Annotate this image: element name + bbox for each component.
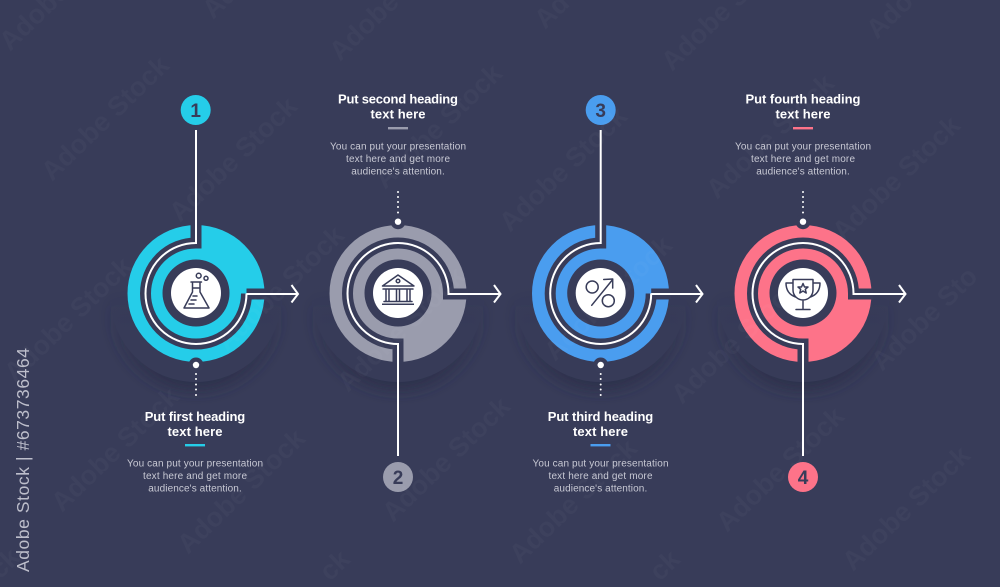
body text 4: text here and get more — [751, 154, 855, 165]
body text 4: You can put your presentation — [735, 142, 871, 153]
body text 2 — [330, 142, 466, 178]
stock watermarks: Adobe Stock — [665, 272, 806, 409]
colored ring 4 — [734, 225, 872, 362]
stock watermarks: ck — [643, 543, 686, 586]
heading 4 — [746, 92, 861, 122]
icon: bank — [364, 260, 432, 326]
dotted connector 3 — [593, 358, 608, 396]
icon: flask — [162, 260, 230, 326]
heading 2: Put second heading — [338, 92, 458, 106]
heading rule 1 — [185, 444, 205, 446]
stock watermarks: Adobe Stock — [210, 219, 351, 356]
stock watermarks: Adobe Stock — [35, 49, 176, 186]
dotted connector 2 — [390, 191, 406, 229]
body text 2: You can put your presentation — [330, 142, 466, 153]
colored ring 3 — [532, 225, 669, 362]
stock watermarks: Adobe Stock — [493, 100, 634, 237]
body text 4: audience's attention. — [756, 166, 850, 178]
step 3 — [514, 95, 702, 494]
heading 3 — [548, 409, 653, 439]
dotted connector 1 — [188, 358, 204, 396]
body text 4 — [735, 142, 871, 178]
stock watermarks: Adobe Stock — [538, 229, 679, 366]
heading 1: text here — [168, 424, 222, 439]
stock watermarks: Adobe Stock — [368, 57, 509, 194]
icon: percent growth — [567, 260, 634, 326]
disc shadow 4 — [717, 210, 889, 390]
number badge 3: 3 — [595, 101, 606, 122]
heading 2 — [338, 92, 458, 122]
stock watermarks: Adobe Stock — [826, 109, 967, 246]
heading rule 4 — [793, 127, 813, 129]
stock watermarks: Adobe Stock — [376, 390, 517, 527]
icon: trophy — [770, 260, 836, 326]
disc shadow 3 — [514, 210, 686, 390]
heading 3: Put third heading — [548, 409, 653, 424]
heading 4: Put fourth heading — [746, 92, 861, 106]
number badge 3 — [586, 95, 616, 125]
number badge 1: 1 — [190, 101, 201, 122]
stock watermarks: Adobe Stock — [45, 380, 186, 517]
stock watermarks: Adobe Stock — [331, 260, 472, 397]
heading rule 3 — [590, 444, 610, 446]
heading 3: text here — [573, 424, 628, 439]
colored ring 1 — [128, 225, 264, 362]
channel and connector line 2 — [348, 243, 500, 456]
body text 3: audience's attention. — [554, 484, 647, 494]
heading 4: text here — [776, 106, 830, 122]
stock watermarks: Adobe Stock — [700, 67, 841, 204]
body text 3: You can put your presentation — [532, 458, 668, 470]
number badge 4 — [788, 462, 818, 492]
channel and connector line 4 — [752, 243, 906, 456]
heading 2: text here — [370, 106, 426, 122]
body text 1: You can put your presentation — [127, 458, 263, 470]
heading rule 2 — [388, 127, 408, 129]
step 2 — [312, 92, 500, 492]
number badge 2: 2 — [393, 468, 403, 489]
disc shadow 2 — [312, 210, 484, 390]
heading 1: Put first heading — [145, 409, 245, 424]
disc shadow 1 — [110, 210, 282, 390]
stock watermarks: ck — [313, 543, 356, 586]
stock watermarks: Adobe Stock — [710, 400, 851, 537]
number badge 1 — [181, 95, 211, 125]
body text 2: audience's attention. — [351, 166, 445, 178]
dotted connector 4 — [796, 191, 810, 229]
body text 1: text here and get more — [143, 471, 247, 482]
stock watermarks: Adobe Sto — [865, 261, 983, 376]
body text 2: text here and get more — [346, 154, 450, 165]
channel and connector line 3 — [550, 130, 702, 344]
number badge 2 — [383, 462, 413, 492]
step 4 — [717, 92, 906, 492]
number badge 4: 4 — [798, 468, 809, 489]
channel and connector line 1 — [145, 130, 298, 344]
colored ring 2 — [330, 225, 466, 362]
stock watermarks: Adobe Stock — [171, 422, 312, 559]
step 1 — [110, 95, 298, 494]
stock watermarks: Adobe Stock — [836, 439, 977, 576]
body text 3: text here and get more — [548, 471, 653, 482]
stock watermarks: Adobe Stock — [163, 90, 304, 227]
stock watermarks: Adobe Stock — [503, 432, 644, 569]
body text 3 — [532, 458, 668, 494]
stock id vertical label: Adobe Stock | #673736464 — [13, 348, 33, 572]
body text 1: audience's attention. — [148, 484, 242, 494]
body text 1 — [127, 458, 263, 494]
stock watermarks: Adobe Stock — [0, 250, 139, 387]
heading 1 — [145, 409, 245, 439]
